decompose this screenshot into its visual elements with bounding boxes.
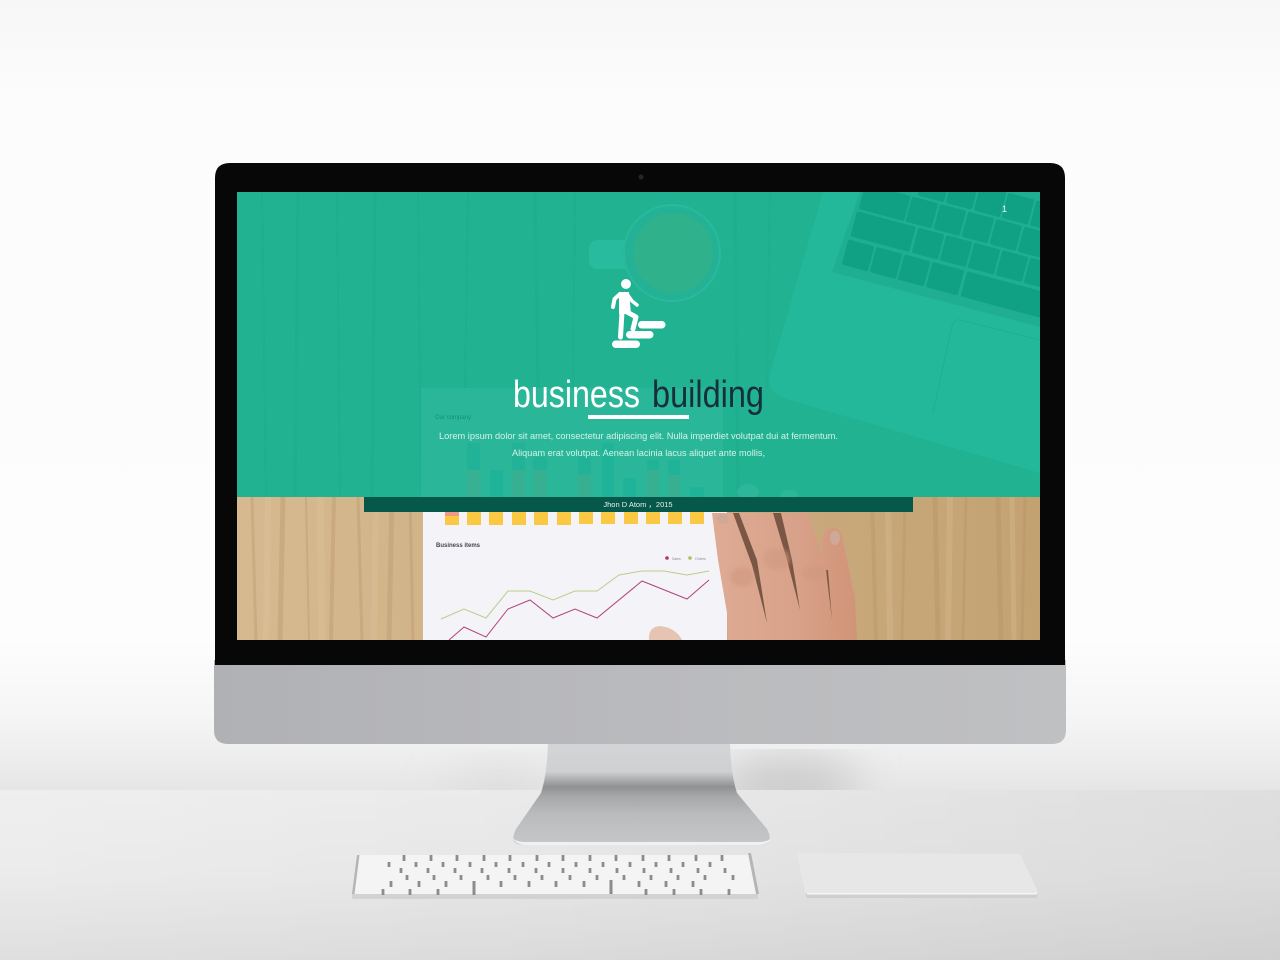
webcam bbox=[638, 174, 644, 180]
green overlay base bbox=[237, 192, 1040, 497]
monitor chin bbox=[214, 660, 1066, 744]
coffee mug bbox=[589, 204, 721, 302]
page number: 1 bbox=[1002, 204, 1007, 214]
chart heading: Business items bbox=[436, 543, 481, 549]
paper under overlay bbox=[421, 388, 723, 497]
trackpad bbox=[797, 853, 1038, 898]
key gaps bbox=[383, 855, 733, 895]
stacked yellow bars bbox=[445, 512, 704, 525]
wood lower band bbox=[237, 497, 1040, 640]
chart legend: Orders bbox=[695, 557, 706, 561]
hand under overlay bbox=[737, 484, 798, 497]
title bbox=[513, 374, 764, 416]
monitor stand bbox=[513, 743, 771, 845]
wireless keyboard bbox=[352, 853, 759, 899]
laptop keyboard well bbox=[832, 192, 1040, 327]
thumb bbox=[649, 626, 682, 640]
knuckles bbox=[732, 548, 792, 586]
author text: Jhon D Atom ，2015 bbox=[603, 500, 673, 509]
desk surface bbox=[0, 790, 1280, 960]
faint bars bbox=[467, 443, 704, 497]
gaps between fingers bbox=[733, 513, 832, 623]
laptop keys bbox=[842, 192, 1040, 318]
body text bbox=[439, 431, 838, 459]
wall shadow beside stand bbox=[731, 749, 860, 790]
hand bbox=[649, 513, 857, 640]
title: building bbox=[652, 374, 764, 416]
title: business bbox=[513, 374, 640, 416]
monitor bezel bbox=[215, 163, 1065, 665]
laptop trackpad bbox=[933, 320, 1040, 413]
fingernails bbox=[717, 514, 840, 545]
chart legend bbox=[665, 556, 706, 560]
faint paper heading: Our company bbox=[435, 415, 471, 421]
author band bbox=[364, 497, 913, 512]
body text: Aliquam erat volutpat. Aenean lacinia lacus aliquet ante mollis, bbox=[512, 448, 765, 459]
line chart bbox=[441, 571, 709, 640]
chart legend: Sales bbox=[672, 557, 681, 561]
icon: person climbing stairs bbox=[612, 279, 666, 348]
screen: presentation slide bbox=[237, 192, 1040, 640]
report paper bbox=[423, 512, 727, 640]
wood grain tint bbox=[262, 192, 770, 497]
laptop bbox=[842, 192, 1040, 318]
title underline bbox=[588, 415, 689, 419]
monitor bbox=[214, 163, 1066, 744]
body text: Lorem ipsum dolor sit amet, consectetur adipiscing elit. Nulla imperdiet volutpat dui at fermentum. bbox=[439, 431, 838, 442]
